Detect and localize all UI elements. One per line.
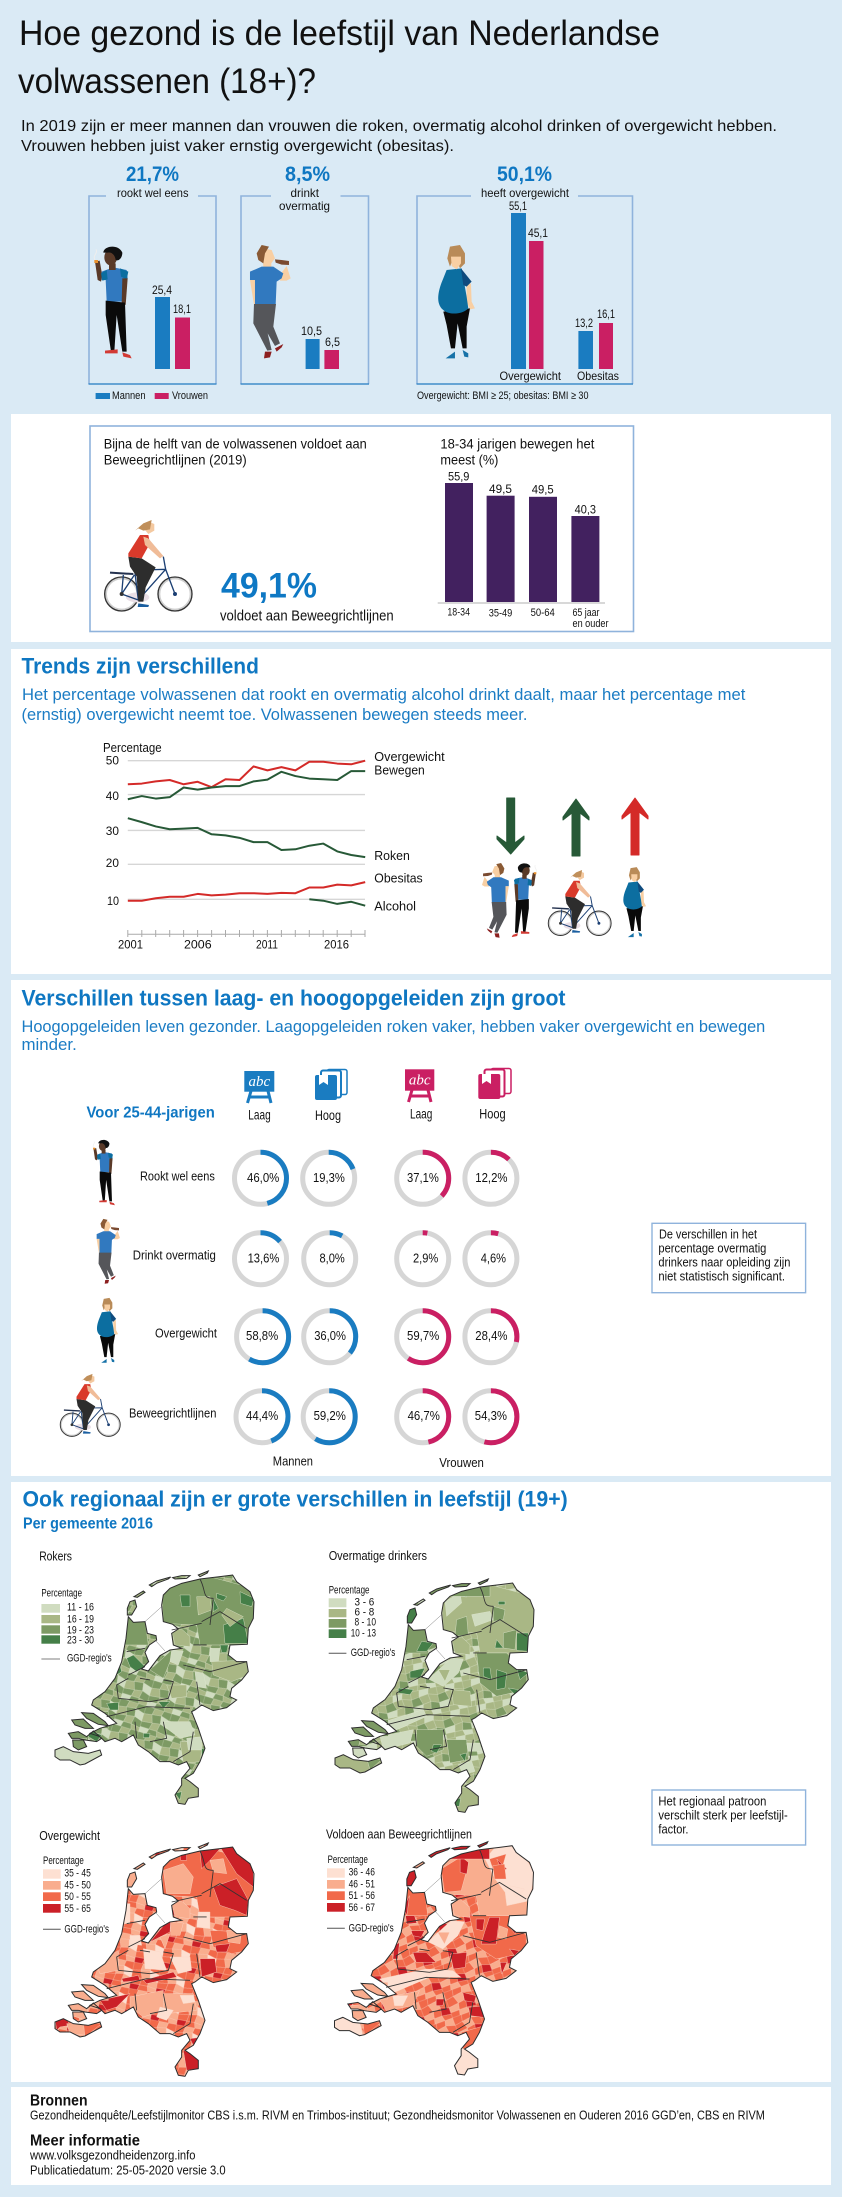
arrow: down green xyxy=(497,798,524,854)
line chart: 30 xyxy=(106,824,119,838)
legend: overgewicht: 55 - 65 xyxy=(64,1903,91,1915)
line chart: 50 xyxy=(106,754,119,768)
panel: heeft overgewicht: 16,1 xyxy=(597,307,615,321)
icon: blue board xyxy=(244,1071,274,1103)
label: hoog blue: Hoog xyxy=(315,1107,341,1123)
row: overgewicht: Overgewicht xyxy=(155,1327,217,1341)
bar chart: age groups: 40,3 xyxy=(575,503,596,517)
legend: mannen vrouwen: Mannen xyxy=(112,390,146,402)
legend: rokers: 16 - 19 xyxy=(67,1613,94,1625)
row: beweegrichtlijnen: 44,4% xyxy=(246,1408,279,1423)
legend: voldoen: 36 - 46 xyxy=(349,1867,375,1879)
legend: overgewicht: 50 - 55 xyxy=(64,1891,91,1903)
callout: regionaal patroon: verschilt sterk per leefstijl- xyxy=(658,1809,788,1823)
row: beweegrichtlijnen: 54,3% xyxy=(475,1408,507,1423)
legend: voldoen: 46 - 51 xyxy=(349,1879,375,1891)
map: overgewicht: Overgewicht xyxy=(39,1828,100,1843)
label: laag blue: Laag xyxy=(248,1106,271,1122)
bar chart: age groups: 65 jaar xyxy=(572,607,600,619)
heading: regionaal: Ook regionaal zijn er grote verschillen in leefstijl (19+) xyxy=(22,1487,568,1512)
row: overgewicht xyxy=(97,1298,517,1363)
arrow: up red xyxy=(622,798,648,855)
panel: heeft overgewicht xyxy=(416,163,633,384)
label: vrouwen: Vrouwen xyxy=(439,1455,484,1470)
callout: niet significant: niet statistisch significant. xyxy=(658,1270,785,1284)
map: overmatige drinkers xyxy=(329,1548,543,1820)
legend: overgewicht: 45 - 50 xyxy=(64,1880,91,1892)
line chart: 2016 xyxy=(324,938,349,952)
text: opleiding intro xyxy=(22,1017,765,1054)
label: laag pink: Laag xyxy=(410,1105,432,1121)
legend: drinkers: Percentage xyxy=(329,1585,370,1597)
text: voldoet intro: Bijna de helft van de volwassenen voldoet aan xyxy=(104,436,367,452)
panel: rookt wel eens: 21,7% xyxy=(126,163,179,186)
icon: blue books xyxy=(315,1070,347,1100)
panel: heeft overgewicht: 50,1% xyxy=(497,163,552,186)
legend: drinkers: 8 - 10 xyxy=(354,1617,376,1629)
text: trends intro: Het percentage volwassenen dat rookt en overmatig alcohol drinkt daalt, maar het percentage met xyxy=(22,685,746,704)
subheading: leeftijd: Voor 25-44-jarigen xyxy=(86,1105,215,1122)
legend: mannen vrouwen xyxy=(96,390,208,402)
legend: voldoen: GGD-regio's xyxy=(349,1923,394,1935)
icon: pink board: abc xyxy=(409,1072,431,1088)
map: rokers xyxy=(39,1549,263,1812)
line chart: Overgewicht xyxy=(374,749,445,764)
row: drinkt overmatig: 2,9% xyxy=(413,1251,439,1266)
row: drinkt overmatig xyxy=(97,1219,517,1285)
big number: 49,1% xyxy=(221,566,317,606)
row: overgewicht: 58,8% xyxy=(246,1328,279,1343)
caption: voldoet: voldoet aan Beweegrichtlijnen xyxy=(220,608,394,625)
heading: trends: Trends zijn verschillend xyxy=(22,654,259,679)
row: rookt wel eens: 46,0% xyxy=(247,1170,280,1185)
heading: meer informatie: Meer informatie xyxy=(30,2133,140,2150)
legend: drinkers: 6 - 8 xyxy=(354,1607,374,1619)
callout: regionaal patroon: Het regionaal patroon xyxy=(658,1795,766,1809)
heading: bronnen: Bronnen xyxy=(30,2093,88,2110)
text: publicatiedatum: Publicatiedatum: 25-05-2020 versie 3.0 xyxy=(30,2163,226,2177)
panel: drinkt overmatig: drinkt xyxy=(290,186,320,200)
legend: rokers: Percentage xyxy=(41,1588,82,1600)
callout: niet significant xyxy=(652,1223,806,1293)
legend: drinkers: 3 - 6 xyxy=(354,1597,374,1609)
label: hoog pink: Hoog xyxy=(479,1105,506,1121)
text: website: www.volksgezondheidenzorg.info xyxy=(29,2148,196,2162)
line chart: 40 xyxy=(106,789,119,803)
row: overgewicht: 28,4% xyxy=(475,1328,508,1343)
heading: opleiding: Verschillen tussen laag- en hoogopgeleiden zijn groot xyxy=(22,986,566,1011)
legend: rokers: 19 - 23 xyxy=(67,1624,94,1636)
line chart xyxy=(103,741,445,952)
legend: drinkers xyxy=(329,1585,396,1659)
panel: rookt wel eens: rookt wel eens xyxy=(117,186,188,200)
line chart: 10 xyxy=(107,894,119,908)
line chart: 2001 xyxy=(118,938,143,952)
panel: heeft overgewicht: 55,1 xyxy=(509,199,527,213)
line chart: 20 xyxy=(106,856,119,870)
note: BMI: Overgewicht: BMI ≥ 25; obesitas: BMI ≥ 30 xyxy=(417,390,588,402)
icon: blue board: abc xyxy=(248,1074,270,1090)
callout: regionaal patroon xyxy=(652,1790,806,1845)
panel: rookt wel eens xyxy=(88,163,216,384)
row: drinkt overmatig: 4,6% xyxy=(481,1251,506,1266)
line chart: Obesitas xyxy=(374,870,423,886)
title: Hoe gezond is de leefstijl van Nederlandse xyxy=(19,14,660,53)
text: trends intro: (ernstig) overgewicht neemt toe. Volwassenen bewegen steeds meer. xyxy=(22,705,527,724)
text: opleiding intro: Hoogopgeleiden leven gezonder. Laagopgeleiden roken vaker, hebben vaker overgewicht en bewegen xyxy=(22,1017,765,1036)
icon: pink books xyxy=(478,1068,511,1099)
bar chart: age groups: 55,9 xyxy=(448,470,470,484)
line chart: 2011 xyxy=(256,938,278,952)
bar chart: age groups: 35-49 xyxy=(489,607,512,619)
row: rookt wel eens: 19,3% xyxy=(313,1170,345,1185)
map: overgewicht xyxy=(39,1828,263,2084)
icon: drinking man xyxy=(250,245,291,358)
row: overgewicht: 59,7% xyxy=(407,1328,440,1343)
icon: pink board xyxy=(405,1069,434,1102)
subheading: per gemeente: Per gemeente 2016 xyxy=(23,1516,153,1533)
panel: beweegrichtlijnen xyxy=(11,414,831,642)
row: beweegrichtlijnen: 46,7% xyxy=(408,1408,440,1423)
callout: niet significant: De verschillen in het xyxy=(659,1228,757,1242)
map: voldoen aan beweegrichtlijnen: Voldoen aan Beweegrichtlijnen xyxy=(326,1827,472,1842)
bar chart: age groups: 49,5 xyxy=(489,482,512,496)
map: rokers: Rokers xyxy=(39,1549,72,1564)
arrow: up green xyxy=(563,799,589,856)
legend: rokers: 23 - 30 xyxy=(67,1634,94,1646)
panel: drinkt overmatig: 6,5 xyxy=(325,335,340,349)
title xyxy=(18,14,660,101)
callout: niet significant: percentage overmatig xyxy=(658,1242,766,1256)
panel: drinkt overmatig: overmatig xyxy=(279,199,330,213)
legend: rokers: GGD-regio's xyxy=(67,1653,112,1665)
legend: mannen vrouwen: Vrouwen xyxy=(172,390,208,402)
legend: voldoen: 51 - 56 xyxy=(349,1890,375,1902)
legend: overgewicht: 35 - 45 xyxy=(64,1868,91,1880)
panel: rookt wel eens: 25,4 xyxy=(152,283,172,297)
legend: voldoen xyxy=(327,1854,394,1935)
bar chart: age groups: meest (%) xyxy=(440,452,498,468)
panel: heeft overgewicht: heeft overgewicht xyxy=(481,186,570,200)
legend: drinkers: GGD-regio's xyxy=(351,1647,396,1659)
panel: drinkt overmatig: 8,5% xyxy=(285,163,330,186)
title: volwassenen (18+)? xyxy=(18,62,316,101)
bar chart: age groups: 18-34 jarigen bewegen het xyxy=(440,436,594,452)
panel: heeft overgewicht: Obesitas xyxy=(577,369,619,383)
text: voldoet intro: Beweegrichtlijnen (2019) xyxy=(104,452,247,468)
panel: rookt wel eens: 18,1 xyxy=(173,302,191,316)
panel: drinkt overmatig xyxy=(240,163,369,384)
row: drinkt overmatig: 8,0% xyxy=(320,1251,345,1266)
legend: voldoen: Percentage xyxy=(328,1854,368,1866)
bar chart: age groups: en ouder xyxy=(572,618,609,630)
bar chart: age groups: 49,5 xyxy=(532,483,554,497)
legend: overgewicht: GGD-regio's xyxy=(64,1924,109,1936)
legend: overgewicht: Percentage xyxy=(43,1855,84,1867)
text: trends intro xyxy=(22,685,746,724)
bar chart: age groups: 18-34 xyxy=(447,607,470,619)
legend: overgewicht xyxy=(43,1855,109,1936)
panel: heeft overgewicht: 45,1 xyxy=(528,226,548,240)
legend: rokers xyxy=(41,1588,112,1665)
row: beweegrichtlijnen: Beweegrichtlijnen xyxy=(129,1407,216,1421)
panel: trends xyxy=(11,649,831,974)
row: rookt wel eens xyxy=(93,1140,517,1205)
row: drinkt overmatig: Drinkt overmatig xyxy=(133,1249,216,1263)
callout: regionaal patroon: factor. xyxy=(658,1822,688,1836)
callout: niet significant: drinkers naar opleiding zijn xyxy=(658,1256,790,1270)
map: voldoen aan beweegrichtlijnen xyxy=(326,1827,543,2082)
intro text: In 2019 zijn er meer mannen dan vrouwen die roken, overmatig alcohol drinken of overgewicht hebben. xyxy=(21,118,777,135)
icon: cyclist xyxy=(105,520,192,611)
intro text xyxy=(21,118,777,155)
line chart: Roken xyxy=(374,848,410,863)
panel: heeft overgewicht: 13,2 xyxy=(575,316,593,330)
row: beweegrichtlijnen xyxy=(60,1374,517,1443)
legend: rokers: 11 - 16 xyxy=(67,1602,94,1614)
panel: opleiding xyxy=(11,980,831,1476)
text: opleiding intro: minder. xyxy=(22,1035,77,1054)
intro text: Vrouwen hebben juist vaker ernstig overgewicht (obesitas). xyxy=(21,138,454,155)
legend: drinkers: 10 - 13 xyxy=(351,1627,376,1639)
legend: voldoen: 56 - 67 xyxy=(349,1902,375,1914)
label: mannen: Mannen xyxy=(273,1454,313,1469)
figures: trend people xyxy=(482,863,646,938)
icon: smoking man xyxy=(94,247,132,358)
row: rookt wel eens: 37,1% xyxy=(407,1170,439,1185)
line chart: Percentage xyxy=(103,741,162,755)
line chart: Alcohol xyxy=(374,899,416,914)
bar chart: age groups: 50-64 xyxy=(531,607,555,619)
icon: woman with overweight xyxy=(438,245,475,358)
row: rookt wel eens: Rookt wel eens xyxy=(140,1170,215,1184)
line chart: Bewegen xyxy=(374,763,425,778)
panel: regionaal xyxy=(11,1482,831,2084)
row: rookt wel eens: 12,2% xyxy=(475,1170,508,1185)
panel: heeft overgewicht: Overgewicht xyxy=(500,369,562,383)
bar chart: age groups xyxy=(438,436,609,630)
line chart: 2006 xyxy=(184,938,212,952)
row: overgewicht: 36,0% xyxy=(314,1328,346,1343)
row: beweegrichtlijnen: 59,2% xyxy=(314,1408,346,1423)
text: voldoet intro xyxy=(104,436,367,468)
map: overmatige drinkers: Overmatige drinkers xyxy=(329,1548,427,1563)
panel: bronnen xyxy=(11,2087,831,2185)
panel: drinkt overmatig: 10,5 xyxy=(301,324,322,338)
row: drinkt overmatig: 13,6% xyxy=(248,1251,280,1266)
